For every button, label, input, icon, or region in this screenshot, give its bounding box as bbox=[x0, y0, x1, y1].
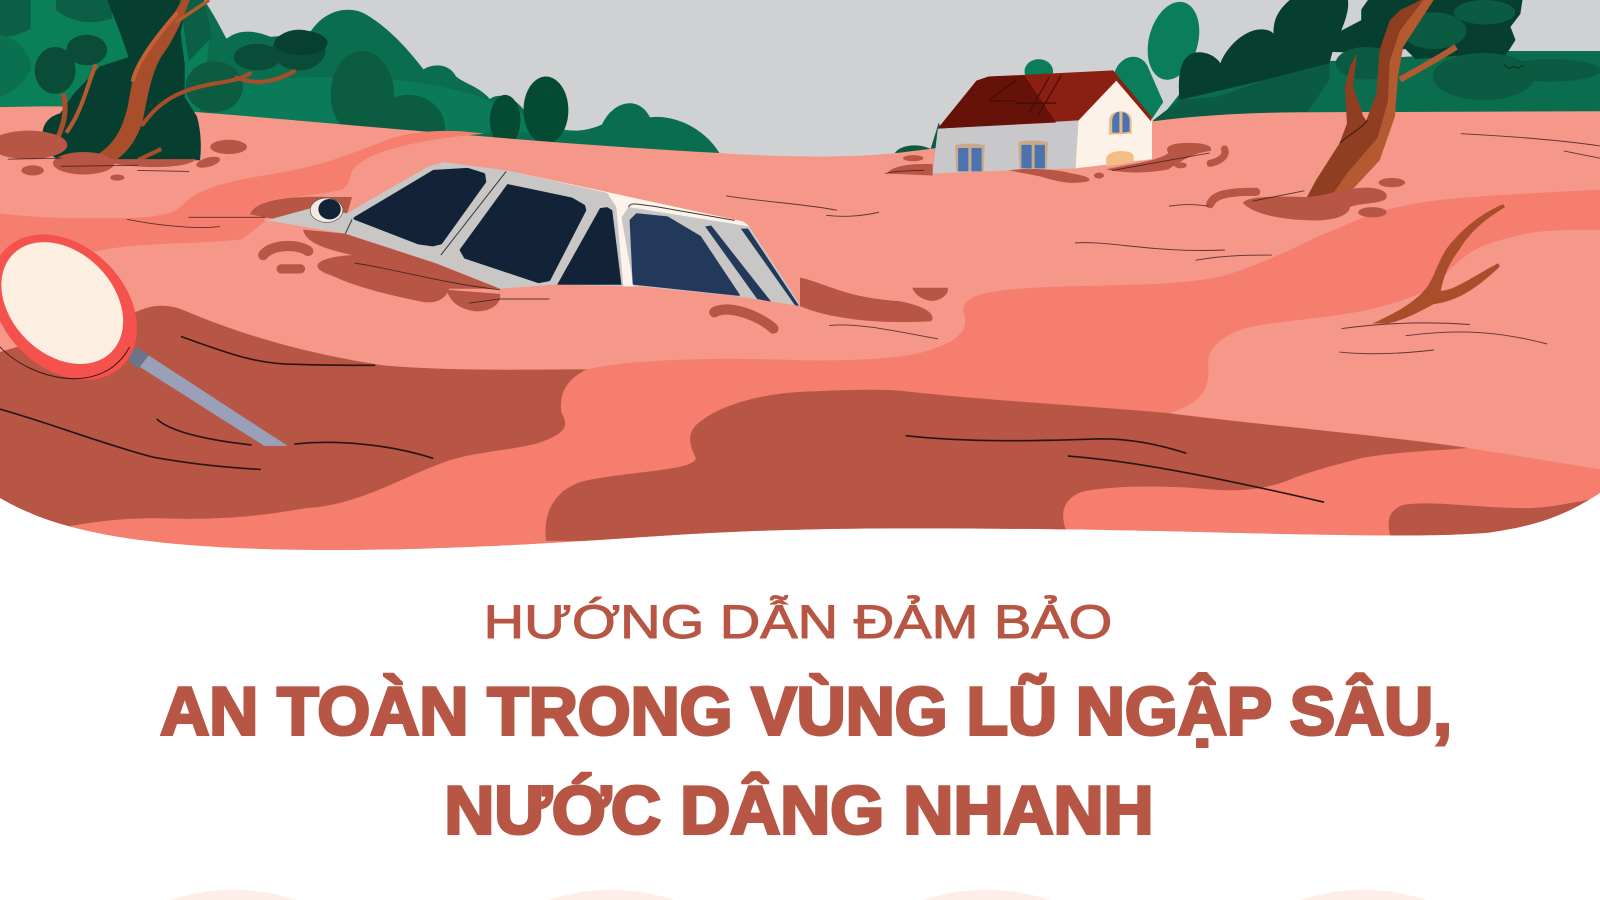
right tree trunk bbox=[1303, 0, 1434, 204]
left tree foliage bbox=[42, 0, 201, 160]
right background forest bbox=[895, 0, 1600, 153]
car details bbox=[441, 171, 735, 255]
circle 2 bbox=[548, 890, 674, 900]
mid water: main current bbox=[0, 190, 1600, 550]
mid water: upper left band bbox=[0, 131, 485, 261]
house roof bbox=[938, 70, 1152, 129]
sign post bbox=[128, 347, 288, 446]
dark water: lower right bbox=[1388, 500, 1590, 536]
rear stripes bbox=[705, 226, 771, 302]
mud patches around left tree bbox=[0, 131, 247, 181]
mud patches around car bbox=[263, 230, 948, 329]
mirror bbox=[310, 198, 343, 222]
car roof highlight bbox=[507, 170, 750, 287]
house bbox=[933, 70, 1152, 173]
title line 1: AN TOÀN TRONG VÙNG LŨ NGẬP SÂU, bbox=[160, 675, 1452, 750]
left tree trunks bbox=[99, 0, 190, 160]
sign face bbox=[0, 218, 147, 388]
mud patches around right tree and house bbox=[887, 143, 1405, 220]
subtitle: HƯỚNG DẪN ĐẢM BẢO bbox=[484, 596, 1112, 648]
light flood water bbox=[0, 106, 1600, 550]
house windows bbox=[955, 144, 985, 171]
submerged car bbox=[266, 162, 801, 307]
left background forest bbox=[0, 0, 720, 153]
ripple lines bbox=[0, 134, 1600, 502]
road sign bbox=[0, 234, 288, 446]
house gable wall bbox=[1076, 81, 1152, 168]
rear window bbox=[631, 214, 739, 295]
heading bbox=[160, 596, 1452, 849]
left tree bbox=[35, 0, 328, 160]
flood illustration bbox=[0, 0, 1600, 550]
circle 4 bbox=[1300, 890, 1427, 900]
title line 2: NƯỚC DÂNG NHANH bbox=[444, 774, 1154, 849]
dark water: lower left bbox=[0, 306, 587, 531]
dry branch bbox=[1372, 204, 1505, 323]
dark water: centre bbox=[545, 390, 1468, 541]
sign red ring bbox=[0, 234, 137, 380]
front side window bbox=[461, 186, 585, 282]
circle 1 bbox=[170, 890, 297, 900]
small triangular window bbox=[557, 207, 621, 285]
windshield bbox=[355, 169, 485, 245]
house side wall bbox=[933, 119, 1079, 173]
mud behind car bbox=[250, 197, 352, 219]
sky bbox=[204, 0, 1600, 156]
water over car bbox=[242, 220, 800, 308]
right tree bbox=[1303, 0, 1456, 204]
car body bbox=[266, 162, 801, 306]
house door bbox=[1106, 151, 1134, 166]
bottom circles row bbox=[170, 890, 1427, 900]
circle 3 bbox=[923, 890, 1050, 900]
